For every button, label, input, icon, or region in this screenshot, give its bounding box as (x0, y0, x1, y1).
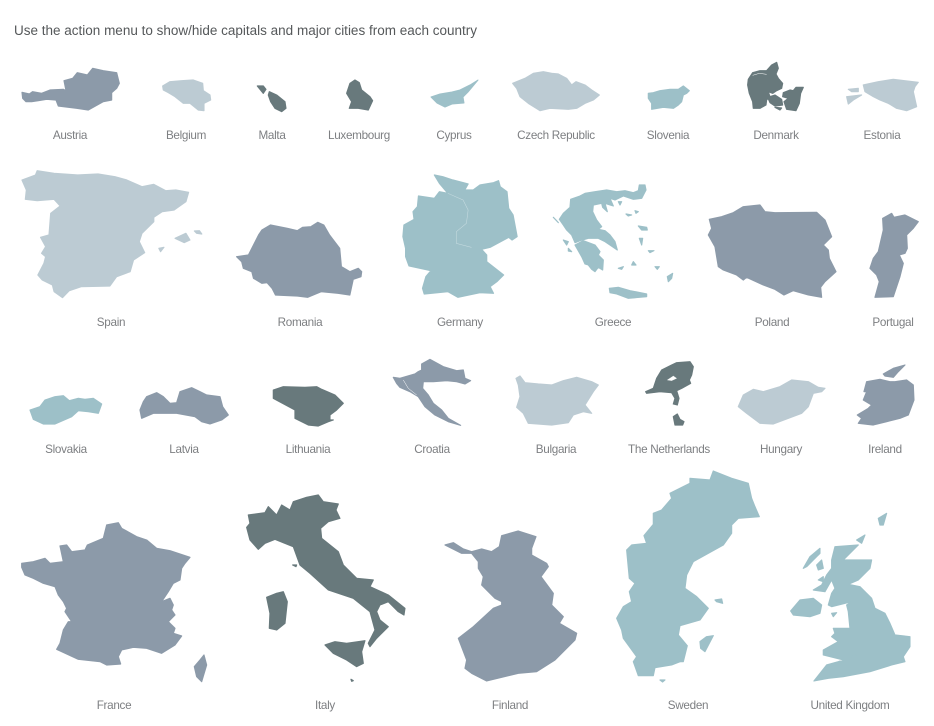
map: Estonia (847, 79, 918, 111)
label: Slovakia: Slovakia (45, 443, 88, 456)
label: Slovenia: Slovenia (647, 129, 690, 142)
map: Portugal (870, 213, 918, 297)
country: Estonia (847, 79, 918, 142)
map: Finland (445, 531, 577, 681)
country: Czech Republic (513, 72, 599, 142)
map: Latvia (140, 388, 228, 424)
label: Greece: Greece (595, 316, 631, 329)
country: Italy (247, 495, 405, 712)
label: The Netherlands: The Netherlands (628, 443, 710, 456)
map: Czech Republic (513, 72, 599, 111)
country: Hungary (738, 380, 825, 456)
label: Estonia: Estonia (864, 129, 901, 142)
map: Italy (247, 495, 405, 681)
country: Germany (403, 175, 517, 329)
map: Austria (22, 68, 119, 110)
map: The Netherlands (646, 362, 693, 425)
title: Use the action menu to show/hide capitals and major cities from each country (14, 23, 477, 38)
label: Italy: Italy (315, 699, 335, 712)
map: Malta (257, 86, 286, 112)
label: Denmark: Denmark (753, 129, 799, 142)
map: Croatia (393, 359, 471, 425)
label: Germany: Germany (437, 316, 483, 329)
map: Germany (403, 175, 517, 297)
label: Poland: Poland (755, 316, 789, 329)
map: Slovenia (648, 86, 689, 109)
map: Poland (708, 205, 836, 297)
label: Hungary: Hungary (760, 443, 802, 456)
country: Austria (22, 68, 119, 142)
label: Croatia: Croatia (414, 443, 451, 456)
label: Czech Republic: Czech Republic (517, 129, 595, 142)
map: Spain (22, 171, 202, 298)
country: Sweden (617, 471, 759, 712)
country: Lithuania (273, 387, 343, 456)
country: Slovenia (647, 86, 690, 142)
country: Poland (708, 205, 836, 329)
country: Ireland (857, 365, 914, 456)
map: Sweden (617, 471, 759, 682)
country: Greece (553, 185, 673, 329)
label: United Kingdom: United Kingdom (811, 699, 889, 712)
label: Malta: Malta (258, 129, 286, 142)
label: Portugal: Portugal (872, 316, 914, 329)
map: Bulgaria (516, 376, 598, 425)
map: United Kingdom (791, 513, 910, 681)
label: Belgium: Belgium (166, 129, 206, 142)
label: Bulgaria: Bulgaria (536, 443, 577, 456)
country: Cyprus (431, 80, 478, 142)
label: Sweden: Sweden (668, 699, 708, 712)
label: Luxembourg: Luxembourg (328, 129, 390, 142)
country: Finland (445, 531, 577, 712)
country: Slovakia (30, 396, 102, 456)
map: Lithuania (273, 387, 343, 426)
map: Hungary (738, 380, 825, 424)
map: Cyprus (431, 80, 478, 107)
map: Luxembourg (347, 80, 373, 110)
label: Ireland: Ireland (868, 443, 902, 456)
label: Romania: Romania (278, 316, 323, 329)
map: Ireland (857, 365, 914, 425)
country: United Kingdom (791, 513, 910, 712)
map: Greece (553, 185, 673, 298)
map: Belgium (163, 80, 211, 111)
label: Lithuania: Lithuania (286, 443, 331, 456)
country: Spain (22, 171, 202, 329)
country: Malta (257, 86, 286, 142)
map: Slovakia (30, 396, 102, 424)
map: Romania (237, 222, 362, 297)
label: Austria: Austria (53, 129, 88, 142)
label: Latvia: Latvia (169, 443, 199, 456)
country: Croatia (393, 359, 471, 456)
country: Portugal (870, 213, 918, 329)
country: France (22, 523, 207, 712)
label: France: France (97, 699, 131, 712)
country: Romania (237, 222, 362, 329)
label: Cyprus: Cyprus (436, 129, 472, 142)
map: France (22, 523, 207, 682)
country: Luxembourg (328, 80, 390, 142)
label: Finland: Finland (492, 699, 528, 712)
country: Denmark (748, 62, 803, 142)
country: Bulgaria (516, 376, 598, 456)
label: Spain: Spain (97, 316, 125, 329)
country: Latvia (140, 388, 228, 456)
country: The Netherlands (628, 362, 710, 456)
map: Denmark (748, 62, 803, 111)
country: Belgium (163, 80, 211, 142)
